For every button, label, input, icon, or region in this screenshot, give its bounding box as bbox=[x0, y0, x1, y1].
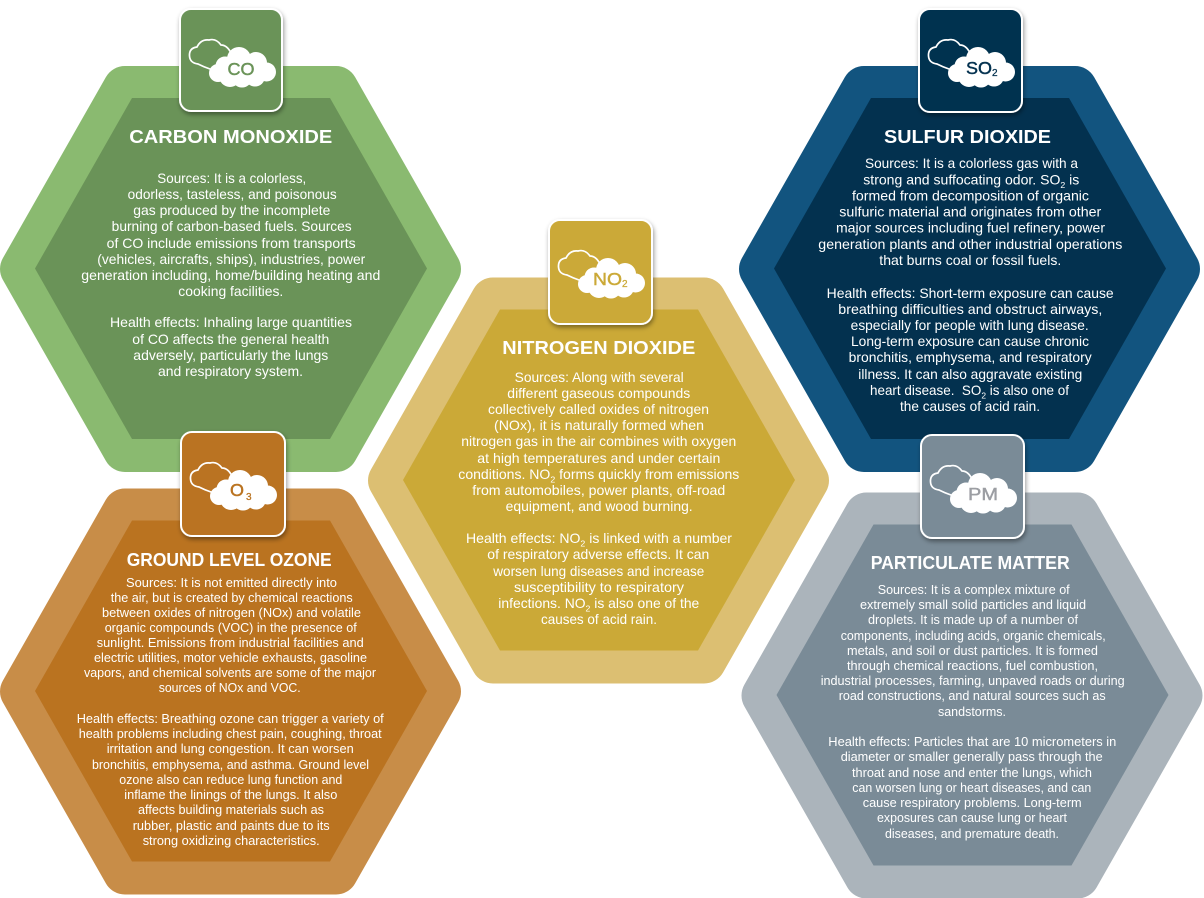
text: nitrogen dioxide health effects: Health effects: NO bbox=[466, 531, 577, 546]
icon: NO2 cloud: 2 bbox=[622, 279, 628, 290]
text: ground level ozone health effects: affects building materials such as bbox=[138, 802, 324, 817]
text: particulate matter sources: extremely small solid particles and liquid bbox=[860, 597, 1086, 612]
hexagon body: nitrogen dioxide bbox=[403, 310, 795, 650]
text: particulate matter sources: Sources: It is a complex mixture of bbox=[878, 582, 1070, 597]
icon: NO2 cloud bbox=[549, 220, 652, 324]
text: nitrogen dioxide health effects: causes of acid rain. bbox=[541, 612, 657, 627]
panel: carbon monoxide bbox=[22, 9, 439, 450]
text: ground level ozone health effects: health problems including chest pain, coughing, throat bbox=[79, 726, 382, 741]
icon: O3 cloud: 3 bbox=[246, 492, 252, 503]
text: carbon monoxide health effects: Health effects: Inhaling large quantities bbox=[110, 315, 352, 330]
text: sulfur dioxide sources: 2 bbox=[1060, 180, 1066, 190]
text: nitrogen dioxide health effects bbox=[466, 531, 732, 627]
text: sulfur dioxide health effects: heart disease. SO bbox=[870, 383, 983, 398]
text: nitrogen dioxide sources: 2 bbox=[550, 474, 556, 484]
panel: particulate matter bbox=[764, 435, 1180, 876]
hexagon border: nitrogen dioxide bbox=[390, 300, 807, 662]
text: carbon monoxide sources: (vehicles, aircrafts, ships), industries, power bbox=[97, 252, 366, 267]
hexagon border: particulate matter bbox=[764, 514, 1180, 876]
hexagon border: sulfur dioxide bbox=[761, 88, 1178, 450]
text: sulfur dioxide sources bbox=[818, 156, 1123, 268]
icon: SO2 cloud: 2 bbox=[992, 68, 998, 79]
text: sulfur dioxide health effects: breathing difficulties and obstruct airways, bbox=[838, 302, 1102, 317]
text: ground level ozone sources: organic compounds (VOC) in the presence of bbox=[105, 620, 357, 635]
text: particulate matter health effects: Health effects: Particles that are 10 micrometers in bbox=[828, 734, 1116, 749]
text: sulfur dioxide health effects: the causes of acid rain. bbox=[900, 399, 1040, 414]
hexagon border: carbon monoxide bbox=[22, 88, 439, 450]
text: carbon monoxide sources: Sources: It is a colorless, bbox=[157, 171, 306, 186]
icon: O3 cloud: O bbox=[230, 480, 244, 500]
text: sulfur dioxide health effects: is also one of bbox=[986, 383, 1069, 398]
text: ground level ozone sources: between oxides of nitrogen (NOx) and volatile bbox=[102, 605, 361, 620]
text: nitrogen dioxide health effects: 2 bbox=[580, 538, 586, 548]
text: ground level ozone health effects: Health effects: Breathing ozone can trigger a variety of bbox=[77, 711, 384, 726]
text: sulfur dioxide health effects: especially for people with lung disease. bbox=[851, 318, 1089, 333]
text: ground level ozone sources: sources of NOx and VOC. bbox=[159, 680, 301, 695]
text: carbon monoxide health effects bbox=[110, 315, 352, 379]
text: nitrogen dioxide sources: from automobiles, power plants, off-road bbox=[472, 483, 725, 498]
hexagon body: sulfur dioxide bbox=[774, 98, 1166, 439]
text: ground level ozone health effects: ozone also can reduce lung function and bbox=[119, 772, 342, 787]
heading: carbon monoxide: CARBON MONOXIDE bbox=[129, 126, 332, 147]
hexagon body: particulate matter bbox=[776, 524, 1168, 866]
text: carbon monoxide sources: odorless, tasteless, and poisonous bbox=[128, 187, 337, 202]
text: ground level ozone health effects: rubber, plastic and paints due to its bbox=[133, 818, 330, 833]
text: nitrogen dioxide sources: at high temperatures and under certain bbox=[477, 451, 720, 466]
text: sulfur dioxide sources: Sources: It is a colorless gas with a bbox=[865, 156, 1078, 171]
icon: SO2 cloud: SO bbox=[966, 58, 992, 78]
text: carbon monoxide sources: of CO include emissions from transports bbox=[107, 236, 356, 251]
text: particulate matter sources bbox=[821, 582, 1125, 719]
hexagon body: ground level ozone bbox=[35, 520, 427, 862]
heading: sulfur dioxide: SULFUR DIOXIDE bbox=[884, 126, 1051, 147]
text: ground level ozone health effects: bronchitis, emphysema, and asthma. Ground level bbox=[92, 757, 369, 772]
text: sulfur dioxide sources: sulfuric material and originates from other bbox=[839, 205, 1102, 220]
icon: SO2 cloud bbox=[919, 9, 1022, 112]
text: particulate matter sources: droplets. It is made up of a number of bbox=[868, 612, 1078, 627]
text: sulfur dioxide sources: major sources including fuel refinery, power bbox=[836, 221, 1105, 236]
text: nitrogen dioxide health effects: worsen lung diseases and increase bbox=[492, 564, 704, 579]
text: ground level ozone sources: Sources: It is not emitted directly into bbox=[126, 575, 337, 590]
text: sulfur dioxide health effects: Health effects: Short-term exposure can cause bbox=[827, 286, 1114, 301]
heading: particulate matter: PARTICULATE MATTER bbox=[871, 552, 1070, 573]
text: particulate matter health effects bbox=[828, 734, 1116, 841]
panel: nitrogen dioxide bbox=[390, 220, 807, 662]
text: particulate matter health effects: diseases, and premature death. bbox=[885, 826, 1059, 841]
text: sulfur dioxide health effects: 2 bbox=[981, 390, 986, 400]
heading: ground level ozone: GROUND LEVEL OZONE bbox=[127, 549, 332, 570]
text: ground level ozone health effects bbox=[77, 711, 384, 848]
text: sulfur dioxide sources: is bbox=[1065, 172, 1080, 188]
text: nitrogen dioxide sources bbox=[458, 370, 740, 514]
text: carbon monoxide sources: cooking facilities. bbox=[178, 284, 283, 299]
text: nitrogen dioxide sources: collectively called oxides of nitrogen bbox=[488, 402, 709, 417]
text: particulate matter health effects: cause respiratory problems. Long-term bbox=[863, 795, 1082, 810]
text: carbon monoxide sources: gas produced by the incomplete bbox=[133, 203, 330, 218]
text: nitrogen dioxide sources: nitrogen gas in the air combines with oxygen bbox=[461, 434, 736, 449]
text: ground level ozone sources: the air, but is created by chemical reactions bbox=[111, 590, 353, 605]
text: carbon monoxide sources bbox=[81, 171, 380, 299]
panel: sulfur dioxide bbox=[761, 9, 1178, 450]
text: nitrogen dioxide health effects: infections. NO bbox=[498, 596, 584, 611]
text: carbon monoxide health effects: and respiratory system. bbox=[158, 364, 303, 379]
text: nitrogen dioxide sources: equipment, and wood burning. bbox=[506, 499, 693, 514]
text: particulate matter sources: sandstorms. bbox=[938, 704, 1006, 719]
text: ground level ozone health effects: strong oxidizing characteristics. bbox=[143, 833, 320, 848]
text: particulate matter health effects: diameter or smaller generally pass through the bbox=[841, 749, 1103, 764]
text: sulfur dioxide sources: formed from decomposition of organic bbox=[852, 189, 1089, 204]
text: sulfur dioxide sources: generation plants and other industrial operations bbox=[818, 237, 1123, 252]
text: carbon monoxide health effects: of CO affects the general health bbox=[132, 332, 329, 347]
text: nitrogen dioxide health effects: is also one of the bbox=[590, 596, 699, 611]
text: particulate matter health effects: throat and nose and enter the lungs, which bbox=[852, 765, 1092, 780]
text: ground level ozone health effects: irritation and lung congestion. It can worsen bbox=[107, 741, 354, 756]
text: nitrogen dioxide health effects: 2 bbox=[586, 604, 591, 614]
text: nitrogen dioxide health effects: is linked with a number bbox=[585, 531, 732, 546]
text: particulate matter sources: metals, and soil or dust particles. It is formed bbox=[847, 643, 1098, 658]
text: nitrogen dioxide sources: different gaseous compounds bbox=[507, 386, 690, 401]
text: sulfur dioxide health effects: Long-term exposure can cause chronic bbox=[851, 334, 1089, 349]
text: nitrogen dioxide health effects: susceptibility to respiratory bbox=[514, 580, 684, 595]
icon: PM cloud: PM bbox=[968, 484, 998, 504]
text: particulate matter sources: industrial processes, farming, unpaved roads or during bbox=[821, 673, 1125, 688]
text: ground level ozone sources: sunlight. Emissions from industrial facilities and bbox=[97, 635, 364, 650]
text: sulfur dioxide health effects bbox=[827, 286, 1114, 414]
text: sulfur dioxide health effects: bronchitis, emphysema, and respiratory bbox=[849, 350, 1092, 365]
text: particulate matter sources: road constructions, and natural sources such as bbox=[839, 688, 1106, 703]
text: nitrogen dioxide sources: forms quickly from emissions bbox=[555, 467, 740, 482]
icon: NO2 cloud: NO bbox=[593, 269, 622, 289]
text: carbon monoxide sources: generation including, home/building heating and bbox=[81, 268, 380, 283]
hexagon border: ground level ozone bbox=[22, 510, 439, 872]
icon: O3 cloud bbox=[181, 432, 285, 536]
text: particulate matter sources: through chemical reactions, fuel combustion, bbox=[847, 658, 1098, 673]
icon: CO cloud: CO bbox=[228, 59, 254, 79]
text: carbon monoxide health effects: adversely, particularly the lungs bbox=[133, 348, 328, 363]
icon: CO cloud bbox=[180, 9, 282, 111]
heading: nitrogen dioxide: NITROGEN DIOXIDE bbox=[502, 337, 695, 358]
text: sulfur dioxide sources: that burns coal or fossil fuels. bbox=[879, 253, 1061, 268]
text: ground level ozone sources: electric utilities, motor vehicle exhausts, gasoline bbox=[94, 650, 367, 665]
icon: PM cloud bbox=[921, 435, 1024, 538]
text: nitrogen dioxide sources: (NOx), it is naturally formed when bbox=[494, 418, 704, 433]
panel: ground level ozone bbox=[22, 432, 439, 872]
text: nitrogen dioxide health effects: of respiratory adverse effects. It can bbox=[487, 547, 709, 562]
text: ground level ozone health effects: inflame the linings of the lungs. It also bbox=[124, 787, 337, 802]
text: particulate matter health effects: can worsen lung or heart diseases, and can bbox=[852, 780, 1091, 795]
text: particulate matter health effects: exposures can cause lung or heart bbox=[877, 810, 1067, 825]
text: particulate matter sources: components, including acids, organic chemicals, bbox=[841, 628, 1106, 643]
hexagon body: carbon monoxide bbox=[35, 98, 427, 439]
text: ground level ozone sources bbox=[84, 575, 377, 695]
text: sulfur dioxide health effects: illness. It can also aggravate existing bbox=[858, 367, 1082, 382]
text: carbon monoxide sources: burning of carbon-based fuels. Sources bbox=[112, 219, 352, 234]
text: nitrogen dioxide sources: Sources: Along with several bbox=[515, 370, 684, 385]
text: nitrogen dioxide sources: conditions. NO bbox=[458, 467, 547, 482]
text: sulfur dioxide sources: strong and suffocating odor. SO bbox=[863, 172, 1054, 188]
text: ground level ozone sources: vapors, and chemical solvents are some of the major bbox=[84, 665, 377, 680]
